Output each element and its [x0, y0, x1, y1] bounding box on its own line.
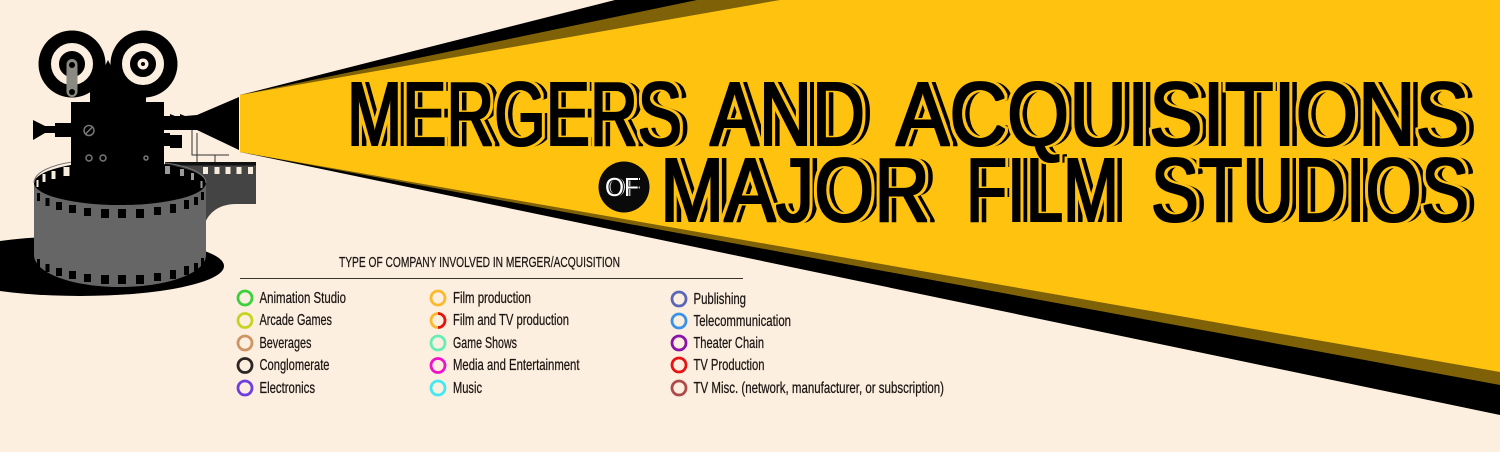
legend column 3: Theater Chain: [694, 335, 764, 352]
film camera on film roll: [0, 30, 256, 296]
legend column 1: Arcade Games: [260, 312, 332, 329]
legend heading: TYPE OF COMPANY INVOLVED IN MERGER/ACQUISITION: [339, 254, 620, 271]
legend column 3: TV Production: [694, 357, 764, 374]
film strip leaving the roll: [165, 162, 256, 226]
film roll body: [34, 161, 206, 287]
title: MAJOR: [660, 141, 930, 241]
legend column 2: [431, 290, 580, 397]
legend column 1: [238, 290, 346, 397]
legend column 1: Conglomerate: [260, 357, 330, 374]
roll shadow: [0, 236, 224, 296]
title: FILM: [966, 141, 1119, 241]
title: AND: [710, 65, 865, 165]
camera body: [33, 30, 239, 190]
legend column 2: Film production: [453, 290, 531, 307]
legend column 3: Publishing: [694, 291, 746, 308]
legend: [238, 254, 944, 397]
camera dials: [84, 126, 148, 161]
legend column 1: Animation Studio: [260, 290, 346, 307]
"of" badge: OF: [605, 172, 639, 202]
"of" badge: [598, 162, 650, 212]
title: [347, 65, 1469, 241]
legend column 2: Game Shows: [453, 335, 517, 352]
title: MERGERS: [347, 65, 682, 165]
legend column 3: TV Misc. (network, manufacturer, or subscription): [694, 380, 944, 397]
projector light beam: [240, 0, 1500, 415]
legend column 3: [672, 291, 944, 397]
legend column 2: Film and TV production: [453, 312, 569, 329]
legend column 2: Media and Entertainment: [453, 357, 580, 374]
legend column 1: Electronics: [260, 380, 315, 397]
left reel detail: [55, 47, 89, 97]
right reel detail: [126, 47, 160, 81]
legend column 3: Telecommunication: [694, 313, 791, 330]
legend column 1: Beverages: [260, 335, 312, 352]
legend column 2: Music: [453, 380, 482, 397]
camera support lines: [192, 130, 229, 162]
